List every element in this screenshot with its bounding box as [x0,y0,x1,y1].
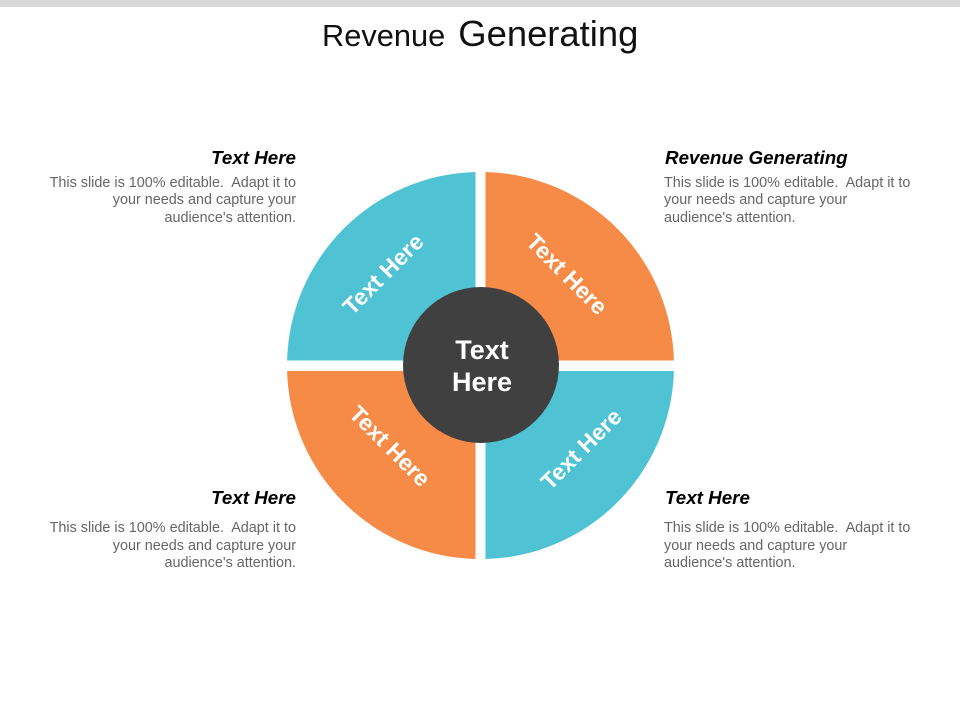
text block: bottom left: audience's attention. [164,555,296,571]
text block: bottom right: This slide is 100% editable. Adapt it to [664,520,910,536]
text block: bottom left: This slide is 100% editable. Adapt it to [50,520,296,536]
panel: bottom-left quadrant [287,371,476,559]
text block: top left: Text Here [211,147,296,168]
panel: bottom-left quadrant: Text Here [344,400,436,492]
text block: bottom right: audience's attention. [664,555,796,571]
diagram: quadrant wheel [287,172,674,559]
center circle: Text [455,335,509,365]
title: Revenue Generating [322,13,638,54]
center circle [403,287,559,443]
text block: top right: This slide is 100% editable. Adapt it to [664,175,910,191]
text block: top right [664,147,910,226]
panel: top-right quadrant: Text Here [521,228,613,320]
text block: bottom right: Text Here [665,487,750,508]
text block: top right: Revenue Generating [665,147,848,168]
panel: bottom-right quadrant [486,371,674,559]
text block: bottom right [664,487,910,571]
text block: bottom left: your needs and capture your [113,538,296,554]
text block: top left [50,147,296,226]
panel: top-right quadrant [486,172,674,360]
text block: bottom left [50,487,296,571]
text block: bottom right: your needs and capture your [664,538,847,554]
panel: top-left quadrant: Text Here [337,228,429,320]
text block: top left: your needs and capture your [113,192,296,208]
panel: top-left quadrant [287,172,476,360]
panel: bottom-right quadrant: Text Here [535,403,627,495]
text block: top right: your needs and capture your [664,192,847,208]
text block: bottom left: Text Here [211,487,296,508]
text block: top left: This slide is 100% editable. Adapt it to [50,175,296,191]
center circle: Here [452,367,512,397]
text block: top left: audience's attention. [164,210,296,226]
text block: top right: audience's attention. [664,210,796,226]
